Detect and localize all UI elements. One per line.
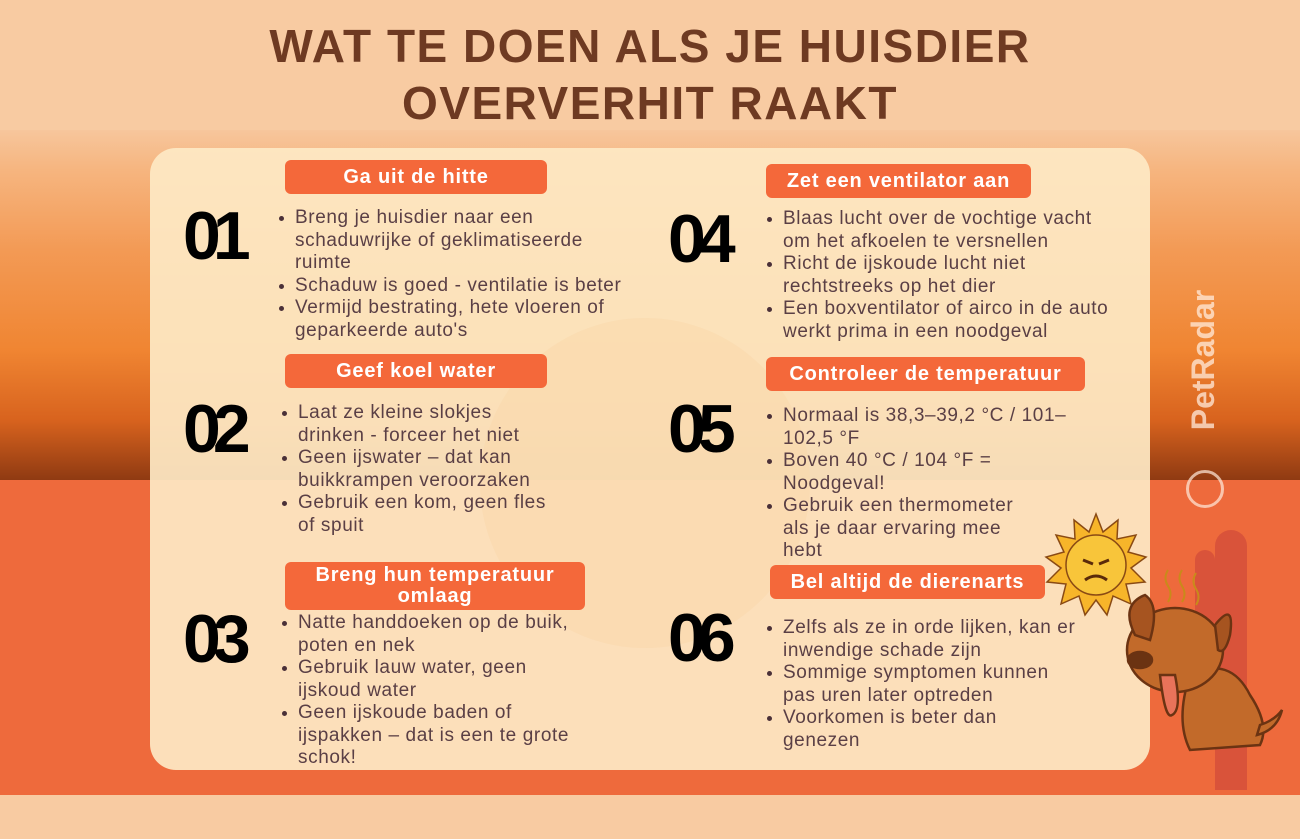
palm shadow bbox=[480, 318, 810, 648]
section 05 bbox=[668, 357, 1085, 561]
bullets 01: Vermijd bestrating, hete vloeren of bbox=[295, 297, 604, 318]
title: WAT TE DOEN ALS JE HUISDIER bbox=[269, 20, 1031, 72]
bullets 02: drinken - forceer het niet bbox=[298, 424, 520, 446]
number 01: 01 bbox=[183, 198, 243, 274]
bullets 01: schaduwrijke of geklimatiseerde bbox=[295, 230, 583, 250]
number 06: 06 bbox=[668, 600, 728, 676]
background scene bbox=[0, 130, 1300, 795]
heading 02 bbox=[285, 354, 547, 388]
heading 02: Geef koel water bbox=[336, 360, 496, 382]
bullets 04: werkt prima in een noodgeval bbox=[783, 320, 1048, 342]
title bbox=[269, 20, 1031, 129]
number 05: 05 bbox=[668, 391, 728, 467]
logo: PetRadar bbox=[1185, 290, 1224, 508]
heading 06 bbox=[770, 565, 1045, 599]
bullets 06: genezen bbox=[783, 730, 860, 750]
bullets 05: Normaal is 38,3–39,2 °C / 101– bbox=[783, 405, 1066, 426]
number 04: 04 bbox=[668, 201, 728, 277]
bullets 04 bbox=[767, 208, 1108, 342]
bullets 05: hebt bbox=[783, 540, 822, 561]
bullets 02: Geen ijswater – dat kan bbox=[298, 447, 511, 468]
icon: cactus right bbox=[1195, 530, 1247, 790]
bullets 04: rechtstreeks op het dier bbox=[783, 276, 996, 296]
bullets 03: Natte handdoeken op de buik, bbox=[298, 612, 568, 633]
bullets 06: pas uren later optreden bbox=[783, 684, 993, 706]
bullets 05: Noodgeval! bbox=[783, 472, 885, 494]
bullets 02: buikkrampen veroorzaken bbox=[298, 470, 530, 490]
bottom band bbox=[0, 795, 1300, 839]
number 02: 02 bbox=[183, 391, 243, 467]
bullets 04: Blaas lucht over de vochtige vacht bbox=[783, 208, 1092, 229]
bullets 03: Geen ijskoude baden of bbox=[298, 702, 512, 723]
section 03 bbox=[183, 562, 585, 768]
section 04 bbox=[668, 164, 1108, 342]
heading 05: Controleer de temperatuur bbox=[789, 363, 1062, 385]
bullets 01: ruimte bbox=[295, 252, 351, 273]
bullets 01: Schaduw is goed - ventilatie is beter bbox=[295, 274, 621, 296]
heading 03: omlaag bbox=[398, 585, 472, 607]
bullets 04: Richt de ijskoude lucht niet bbox=[783, 253, 1026, 274]
title: OVERVERHIT RAAKT bbox=[402, 77, 898, 129]
bullets 03: ijspakken – dat is een te grote bbox=[298, 724, 569, 746]
bullets 06: Sommige symptomen kunnen bbox=[783, 662, 1049, 683]
bullets 06 bbox=[767, 617, 1075, 750]
bullets 06: Zelfs als ze in orde lijken, kan er bbox=[783, 617, 1075, 638]
heading 06: Bel altijd de dierenarts bbox=[791, 571, 1024, 593]
bullets 06: Voorkomen is beter dan bbox=[783, 707, 997, 728]
icon: angry sun bbox=[1044, 512, 1148, 616]
bullets 03: Gebruik lauw water, geen bbox=[298, 657, 527, 678]
heading 04: Zet een ventilator aan bbox=[787, 170, 1010, 192]
heading 01 bbox=[285, 160, 547, 194]
heading 05 bbox=[766, 357, 1085, 391]
bullets 01 bbox=[279, 207, 621, 340]
bullets 05: als je daar ervaring mee bbox=[783, 518, 1001, 538]
bullets 03: ijskoud water bbox=[298, 680, 417, 700]
main card bbox=[150, 148, 1150, 770]
heading 03 bbox=[285, 562, 585, 610]
bullets 01: geparkeerde auto's bbox=[295, 320, 468, 340]
bullets 02: Laat ze kleine slokjes bbox=[298, 402, 492, 423]
bullets 05: Boven 40 °C / 104 °F = bbox=[783, 450, 991, 471]
bullets 04: om het afkoelen te versnellen bbox=[783, 230, 1049, 252]
heading 03: Breng hun temperatuur bbox=[315, 564, 555, 586]
heading 01: Ga uit de hitte bbox=[343, 166, 489, 188]
bullets 02: of spuit bbox=[298, 514, 364, 536]
section 06 bbox=[668, 565, 1075, 750]
number 03: 03 bbox=[183, 601, 243, 677]
icon: overheated dog bbox=[1126, 570, 1284, 752]
logo: PetRadar: PetRadar bbox=[1185, 290, 1221, 430]
heading 04 bbox=[766, 164, 1031, 198]
bullets 05 bbox=[767, 405, 1066, 561]
bullets 03 bbox=[282, 612, 569, 768]
bullets 02 bbox=[282, 402, 546, 536]
bullets 02: Gebruik een kom, geen fles bbox=[298, 492, 546, 513]
bullets 03: schok! bbox=[298, 747, 357, 768]
bullets 05: 102,5 °F bbox=[783, 428, 860, 448]
bullets 03: poten en nek bbox=[298, 634, 415, 656]
bullets 06: inwendige schade zijn bbox=[783, 640, 982, 660]
bullets 05: Gebruik een thermometer bbox=[783, 495, 1013, 516]
bullets 01: Breng je huisdier naar een bbox=[295, 207, 533, 228]
section 02 bbox=[183, 354, 547, 536]
section 01 bbox=[183, 160, 621, 340]
bullets 04: Een boxventilator of airco in de auto bbox=[783, 298, 1108, 319]
